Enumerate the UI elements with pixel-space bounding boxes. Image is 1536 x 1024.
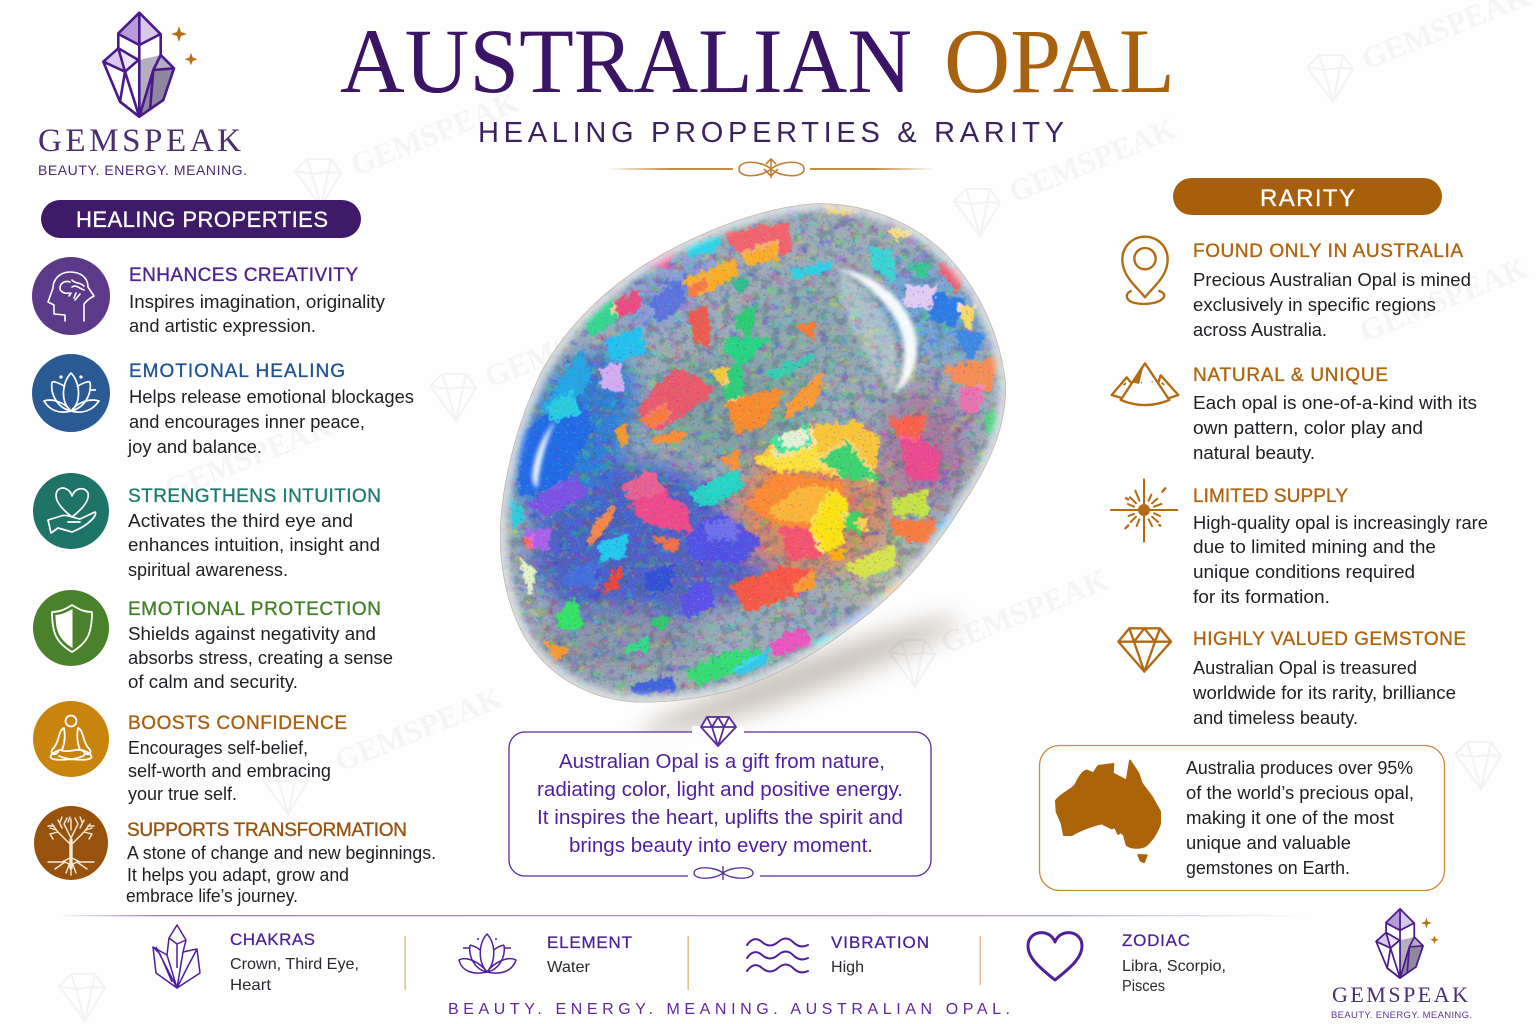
icon: map pin [1122, 237, 1168, 304]
description: spiritual awareness. [128, 560, 288, 580]
icon: australia map [1056, 761, 1160, 862]
value: High [831, 959, 864, 976]
logo tagline: BEAUTY. ENERGY. MEANING. [38, 162, 247, 178]
icon: diamond [1118, 628, 1171, 672]
icon: mountains [1112, 363, 1178, 405]
logo tagline small: BEAUTY. ENERGY. MEANING. [1331, 1010, 1472, 1021]
item: strengthens intuition [33, 473, 381, 580]
icon: shield [33, 590, 109, 666]
icon: crystal logo [103, 13, 198, 117]
heading: BOOSTS CONFIDENCE [128, 713, 347, 734]
description: exclusively in specific regions [1193, 295, 1436, 315]
watermarks: GEMSPEAK [480, 296, 657, 394]
icon: heart [1028, 933, 1082, 980]
callout text: of the world’s precious opal, [1186, 783, 1414, 803]
title: AUSTRALIAN [340, 10, 912, 112]
panel: rarity [1111, 178, 1488, 728]
icon: crystal logo small [1376, 909, 1439, 978]
panel: central quote [509, 717, 931, 882]
callout text: unique and valuable [1186, 833, 1351, 853]
description: for its formation. [1193, 587, 1330, 607]
flourish [688, 866, 760, 882]
heading: LIMITED SUPPLY [1193, 486, 1348, 507]
value: Libra, Scorpio, [1122, 958, 1226, 975]
description [1193, 393, 1477, 463]
description: due to limited mining and the [1193, 537, 1436, 557]
item: found only in australia [1122, 237, 1471, 340]
label: ELEMENT [547, 933, 632, 952]
description [126, 843, 436, 906]
heading pill: healing properties [41, 200, 361, 238]
description: High-quality opal is increasingly rare [1193, 513, 1488, 533]
description: It helps you adapt, grow and [127, 865, 349, 885]
title divider ornament [608, 159, 935, 178]
callout text: making it one of the most [1186, 808, 1394, 828]
icon: lotus [32, 354, 110, 432]
icon: crystal cluster [153, 925, 200, 988]
icon: hand holding heart [33, 473, 109, 549]
logo wordmark small: GEMSPEAK [1332, 982, 1468, 1007]
value: Heart [230, 977, 272, 994]
description: and artistic expression. [129, 316, 316, 336]
highlight top right [835, 268, 917, 393]
description: Precious Australian Opal is mined [1193, 270, 1471, 290]
value [230, 956, 359, 994]
description [129, 292, 385, 336]
watermarks: GEMSPEAK [1355, 250, 1532, 348]
rim [500, 203, 1006, 702]
attribute: element [459, 933, 632, 976]
quote text [537, 751, 903, 857]
heading: STRENGTHENS INTUITION [128, 486, 381, 507]
description: your true self. [128, 784, 237, 804]
callout text [1186, 758, 1414, 878]
item: emotional healing [32, 354, 414, 457]
attribute: chakras [153, 925, 359, 994]
title: OPAL [944, 10, 1175, 112]
label: ZODIAC [1122, 931, 1190, 950]
description: A stone of change and new beginnings. [127, 843, 436, 863]
description: Shields against negativity and [128, 624, 376, 644]
footer tagline: BEAUTY. ENERGY. MEANING. AUSTRALIAN OPAL. [448, 1001, 1010, 1018]
description: absorbs stress, creating a sense [128, 648, 393, 668]
opal stone [487, 190, 1017, 751]
panel: healing properties [32, 200, 436, 906]
item: highly valued gemstone [1118, 628, 1466, 728]
callout text: Australia produces over 95% [1186, 758, 1413, 778]
highlight left [532, 420, 556, 488]
icon: diamond [692, 717, 744, 746]
description: joy and balance. [127, 437, 262, 457]
callout text: gemstones on Earth. [1186, 858, 1350, 878]
description: Inspires imagination, originality [129, 292, 385, 312]
quote text: brings beauty into every moment. [569, 835, 873, 857]
description: Activates the third eye and [128, 511, 353, 531]
watermarks: GEMSPEAK [330, 680, 507, 778]
heading pill: rarity: RARITY [1260, 185, 1355, 212]
description: worldwide for its rarity, brilliance [1192, 683, 1456, 703]
description: and timeless beauty. [1193, 708, 1358, 728]
description [128, 624, 393, 692]
icon: meditating figure [33, 701, 109, 777]
quote text: It inspires the heart, uplifts the spirit and [537, 807, 903, 829]
description: natural beauty. [1193, 443, 1315, 463]
description [1193, 513, 1488, 607]
callout: australia production [1040, 746, 1444, 890]
watermarks: GEMSPEAK [346, 84, 523, 182]
description [128, 511, 380, 580]
watermarks: GEMSPEAK [1004, 111, 1181, 209]
description [128, 738, 331, 804]
stone shadow [635, 605, 965, 751]
heading: EMOTIONAL PROTECTION [128, 599, 381, 620]
value: Pisces [1122, 978, 1165, 995]
value: Water [547, 959, 591, 976]
description [1192, 658, 1456, 728]
description: self-worth and embracing [128, 761, 331, 781]
description: across Australia. [1193, 320, 1327, 340]
heading pill: rarity [1173, 178, 1442, 215]
description [127, 387, 414, 457]
description: Australian Opal is treasured [1193, 658, 1417, 678]
subtitle: HEALING PROPERTIES & RARITY [478, 117, 1064, 149]
value: Crown, Third Eye, [230, 956, 359, 973]
heading pill: healing properties: HEALING PROPERTIES [76, 207, 328, 232]
item: supports transformation [34, 806, 436, 906]
heading: HIGHLY VALUED GEMSTONE [1193, 629, 1466, 650]
description: of calm and security. [128, 672, 298, 692]
attribute: vibration [747, 933, 929, 976]
logo wordmark: GEMSPEAK [38, 123, 241, 159]
footer: attributes [153, 925, 1226, 995]
icon: head with brain [32, 257, 110, 335]
attribute: zodiac [1028, 931, 1226, 995]
label: VIBRATION [831, 933, 929, 952]
icon: waves [747, 938, 808, 972]
heading: FOUND ONLY IN AUSTRALIA [1193, 241, 1463, 262]
heading: NATURAL & UNIQUE [1193, 365, 1388, 386]
heading: SUPPORTS TRANSFORMATION [127, 820, 407, 841]
description: own pattern, color play and [1193, 418, 1423, 438]
icon: sparkle burst [1111, 479, 1177, 542]
heading: EMOTIONAL HEALING [129, 361, 345, 382]
item: enhances creativity [32, 257, 385, 336]
description: Helps release emotional blockages [129, 387, 414, 407]
value [1122, 958, 1226, 995]
description: and encourages inner peace, [129, 412, 365, 432]
label: CHAKRAS [230, 930, 315, 949]
watermarks: GEMSPEAK [936, 562, 1113, 660]
logo: gemspeak top [38, 13, 247, 178]
description: embrace life’s journey. [126, 886, 298, 906]
logo: gemspeak bottom [1331, 909, 1472, 1021]
description [1193, 270, 1471, 340]
description: unique conditions required [1193, 562, 1415, 582]
item: natural and unique [1112, 363, 1477, 463]
quote text: Australian Opal is a gift from nature, [559, 751, 885, 773]
description: Encourages self-belief, [128, 738, 308, 758]
item: limited supply [1111, 479, 1488, 607]
description: enhances intuition, insight and [128, 535, 380, 555]
icon: tree of life [34, 806, 108, 880]
icon: lotus [459, 934, 516, 973]
watermarks: GEMSPEAK [160, 408, 337, 506]
quote text: radiating color, light and positive energy. [537, 779, 903, 801]
item: emotional protection [33, 590, 393, 692]
description: Each opal is one-of-a-kind with its [1193, 393, 1477, 413]
heading: ENHANCES CREATIVITY [129, 265, 358, 286]
item: boosts confidence [33, 701, 347, 804]
